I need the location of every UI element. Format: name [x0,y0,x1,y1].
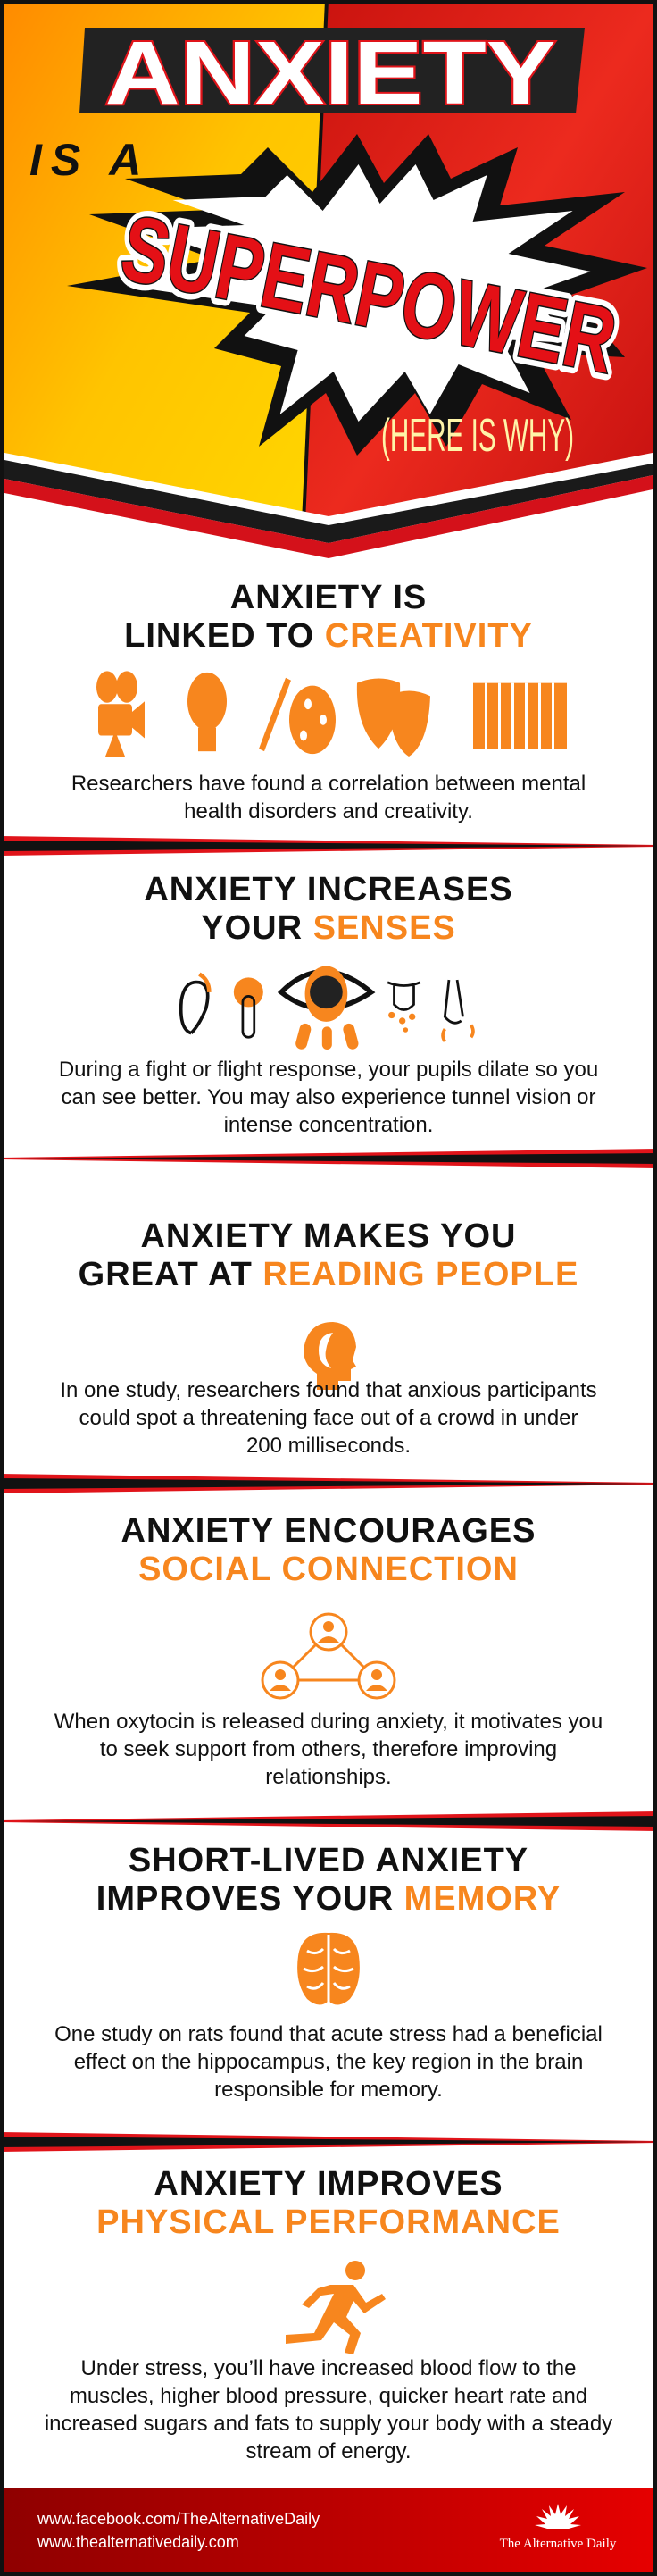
heading 2: YOUR SENSES [201,909,456,947]
text 5 [54,2022,603,2102]
text 5: One study on rats found that acute stress had a beneficial [54,2022,603,2046]
text 2 [59,1058,598,1137]
footer [0,2488,657,2576]
text 4: When oxytocin is released during anxiety, it motivates you [54,1710,603,1734]
footer links: www.thealternativedaily.com [37,2533,239,2551]
heading 2 [144,871,513,947]
starburst [67,134,647,456]
text 5: effect on the hippocampus, the key region in the brain [74,2050,583,2074]
heading 5: SHORT-LIVED ANXIETY [129,1842,528,1879]
text 4: to seek support from others, therefore improving [100,1737,557,1761]
divider 2 [4,1149,653,1168]
text 6: Under stress, you’ll have increased blood flow to the [81,2356,576,2380]
heading 5 [96,1842,561,1918]
footer links: www.facebook.com/TheAlternativeDaily [37,2510,320,2528]
text 2: intense concentration. [224,1113,433,1137]
heading 2: ANXIETY INCREASES [144,871,513,908]
text 6: muscles, higher blood pressure, quicker heart rate and [70,2384,587,2408]
heading 6: ANXIETY IMPROVES [154,2165,503,2203]
divider 1 [4,836,653,856]
icons: creativity [96,671,567,757]
title: ANXIETY: ANXIETY [105,23,555,123]
divider 3 [4,1474,653,1493]
text 2: During a fight or flight response, your pupils dilate so you [59,1058,598,1082]
text 4 [54,1710,603,1789]
text 3 [60,1378,597,1458]
heading 1: ANXIETY IS [230,579,427,616]
logo: The Alternative Daily [500,2537,616,2551]
text 4: relationships. [265,1765,392,1789]
logo [500,2504,616,2551]
icons: senses [179,966,475,1050]
heading 4: ANXIETY ENCOURAGES [121,1512,536,1550]
icon: network [261,1613,396,1699]
heading 4 [121,1512,536,1588]
footer links [37,2510,320,2551]
header banner [4,4,653,558]
icon: brain [297,1933,360,2004]
text 2: can see better. You may also experience tunnel vision or [61,1085,596,1109]
text 6 [45,2356,612,2463]
chevron bands [0,452,657,563]
text 6: increased sugars and fats to supply your body with a steady [45,2412,612,2436]
subtitle: IS A: IS A [29,135,150,185]
heading 1: LINKED TO CREATIVITY [124,617,533,655]
divider 4 [4,1811,653,1831]
heading 6 [96,2165,561,2241]
text 3: In one study, researchers found that anxious participants [60,1378,597,1402]
icon: head [304,1322,356,1390]
text 1: Researchers have found a correlation between mental [71,772,586,796]
heading 6: PHYSICAL PERFORMANCE [96,2204,561,2241]
heading 5: IMPROVES YOUR MEMORY [96,1880,561,1918]
divider 5 [4,2132,653,2152]
heading 3: ANXIETY MAKES YOU [140,1217,516,1255]
text 3: could spot a threatening face out of a crowd in under [79,1406,578,1430]
icon: runner [286,2261,386,2354]
text 1: health disorders and creativity. [184,799,473,824]
text 3: 200 milliseconds. [246,1434,411,1458]
text 1 [71,772,586,824]
heading 3 [79,1217,578,1293]
heading 3: GREAT AT READING PEOPLE [79,1256,578,1293]
text 5: responsible for memory. [214,2078,443,2102]
heading 4: SOCIAL CONNECTION [138,1551,519,1588]
text 6: stream of energy. [246,2439,411,2463]
heading 1 [124,579,533,655]
